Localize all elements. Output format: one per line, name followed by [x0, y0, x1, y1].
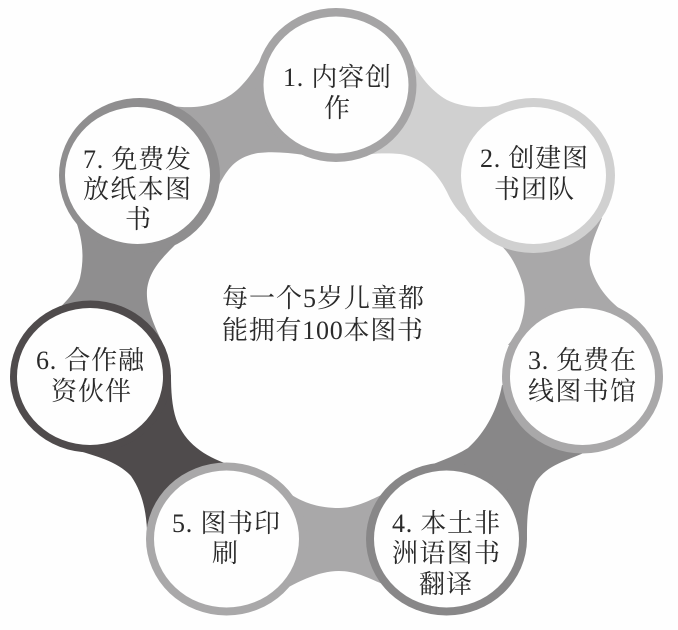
- circle fill: [461, 107, 606, 244]
- label continued: 刷: [212, 539, 238, 568]
- central goal text: [222, 284, 424, 345]
- label: 7. 免费发: [83, 145, 191, 174]
- circle fill: [65, 107, 210, 244]
- step 4: local African language translation: [366, 462, 527, 616]
- connectors between circles: [52, 42, 640, 598]
- connector: step 7 to step 1: [160, 42, 340, 185]
- label continued: 书团队: [494, 175, 574, 204]
- connector: step 4 to step 5: [240, 480, 392, 598]
- step 3: free online library: [502, 300, 663, 454]
- step 5: book printing: [146, 462, 307, 616]
- label last line: 翻译: [419, 570, 472, 599]
- label: 6. 合作融: [36, 346, 145, 375]
- label continued: 作: [324, 94, 350, 123]
- label: 2. 创建图: [480, 144, 588, 173]
- step 2: create book team: [452, 98, 615, 253]
- label: 4. 本土非: [392, 509, 500, 538]
- ring: [146, 462, 307, 616]
- circle fill: [154, 470, 299, 608]
- connector: step 5 to step 6: [70, 375, 233, 540]
- ring: [256, 8, 416, 162]
- ring: [59, 98, 220, 253]
- connector: step 6 to step 7: [52, 190, 204, 350]
- label last line: 书: [125, 205, 151, 234]
- step 7: free paper book distribution: [59, 98, 220, 253]
- label continued: 资伙伴: [51, 377, 131, 406]
- connector: step 3 to step 4: [420, 385, 590, 540]
- label: 3. 免费在: [528, 346, 636, 375]
- ring: [502, 300, 663, 454]
- connector: step 2 to step 3: [497, 200, 640, 345]
- goal line 2: 能拥有100本图书: [222, 316, 423, 345]
- circle fill: [510, 308, 655, 445]
- connector: step 1 to step 2: [365, 60, 530, 235]
- label: 1. 内容创: [283, 63, 391, 92]
- ring: [452, 98, 615, 253]
- step 6: financing partners: [10, 300, 171, 452]
- goal line 1: 每一个5岁儿童都: [222, 284, 424, 313]
- ring: [366, 462, 527, 616]
- label continued: 放纸本图: [83, 175, 191, 204]
- circle fill: [374, 470, 519, 608]
- ring: [10, 300, 171, 452]
- step 1: content creation: [256, 8, 416, 162]
- label: 5. 图书印: [172, 509, 280, 538]
- circle fill: [264, 16, 408, 154]
- circle fill: [17, 308, 163, 445]
- label continued: 线图书馆: [528, 377, 636, 406]
- label continued: 洲语图书: [392, 539, 500, 568]
